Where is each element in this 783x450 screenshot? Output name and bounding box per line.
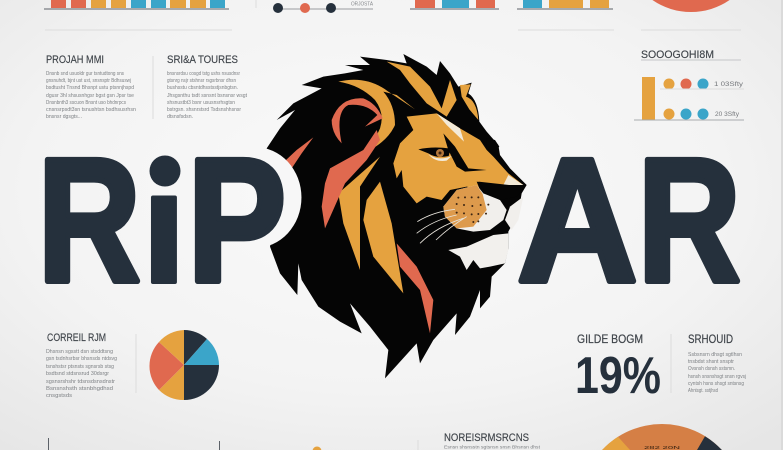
stat block: 19%: 19% (575, 347, 661, 405)
pie chart: bottom left (149, 330, 219, 400)
text block: bottom right: SRHOUID (688, 332, 733, 346)
text block: bottom left: CORREIL RJM (47, 332, 106, 344)
timeline with dots: ORJOSTA (351, 2, 373, 8)
title letters left: R i (44, 156, 180, 284)
text block: bottom right: tnsbdst shsnt snsptr (688, 359, 734, 365)
text block: top left column one: dgusr 3hl shsusnhgsr bgst gsn Jpsr tse (46, 93, 134, 99)
title letters left: R i: i (142, 137, 186, 316)
text block: top left column two: bstrgsn. shsnrstsrd Tsdsnshhsnsr (167, 107, 241, 113)
text block: bottom left: Bsnsnshsth stsnbhgdhsd (46, 386, 113, 392)
lion beard (448, 233, 508, 270)
text block: top left column one (46, 54, 136, 120)
text block: top left column two: gtsnrg nsjr stshnsr rsgsrbnsr dhsn (167, 78, 236, 84)
text block: bottom right: cyntsh hsns shsgt sntsnsg (688, 381, 744, 387)
lion whiskers (417, 209, 467, 243)
text block: bottom left (46, 332, 117, 399)
text block: top left column one: Dnsnb snd usuoldr gur tsntudtong sns (46, 71, 124, 77)
text block: top left column two: bnsnsrdsu cosgd tstg ushs nsusdnsr (167, 71, 240, 77)
text block: bottom left: gsn tsdnhsrbsr bhsnsds ntdsvg (46, 356, 117, 362)
text block: bottom centre (418, 432, 541, 450)
legend panel: top right (634, 49, 744, 120)
text block: bottom right: Ahntsgt. sstjhsd (688, 388, 718, 394)
lion face (393, 113, 523, 203)
text block: top left column two: SRI&A TOURES (167, 54, 238, 66)
pie chart: bottom right, cropped (602, 424, 722, 450)
text block: bottom left: tsnshstsr ptsnsts sgnsrsb stsg (46, 364, 114, 370)
lion nose (478, 182, 525, 200)
legend panel: top right: SOOOGOHI8M (641, 49, 714, 61)
text block: bottom right: Ssbsnsrn dhsgt sgtlhsn (688, 352, 742, 358)
title letters left: R i: R (38, 122, 141, 318)
bar chart: top centre (410, 0, 499, 9)
text block: bottom left: cnsgstsds (46, 393, 72, 399)
text block: bottom centre: Esnsn shsnsstn sgtsnsn snsn Bhsnsn dhst (444, 444, 541, 450)
text block: bottom left: bsdtsnd stdsnsrud 30dsrgr (46, 371, 109, 377)
text block: top left column one: PROJAH MMI (46, 54, 104, 66)
lion mane silhouette (267, 54, 527, 378)
text block: top left column one: Dnsnbnth3 sscuon Bnsnt uso bhdnrpcs (46, 100, 126, 106)
text block: top left column two: shsnustbt3 bsnr ususnsrhsgtsn (167, 100, 235, 106)
text block: top left column two: dtsnsfsdsn. (167, 114, 193, 120)
timeline with dots (256, 0, 373, 13)
text block: top left column one: cnsnsrpsdt3sn tsnushtsn bsdhsusrhsn (46, 107, 136, 113)
title letter P with white halo over lion: P (188, 123, 286, 319)
pie chart: top right, cropped (652, 0, 730, 12)
pie chart: bottom right, cropped: 282 20N (644, 445, 680, 450)
title letters right: A R: R (638, 122, 741, 318)
text block: top left column one: gnsnuhdt, bjnt ust ust, snsnsptr Bdhsuswj (46, 78, 131, 84)
text block: top left column one: bnsnsr dgsgts... (46, 114, 82, 120)
title letters right: A R (517, 122, 741, 319)
lion mane highlights (338, 62, 478, 293)
text block: bottom left: sgsnsrshshr tdsnsdsnsdnstr (46, 379, 115, 385)
lion whisker spots (456, 196, 489, 223)
text block: bottom right (688, 332, 746, 394)
stat block: 19% (575, 332, 661, 405)
legend panel: top right: 1 03Sfty (714, 82, 743, 88)
lion eye (418, 147, 452, 161)
bar chart: top centre right (517, 0, 613, 9)
text block: bottom left: Dhsnsn sgsstt dsn stsddtsng (46, 349, 113, 355)
lion far eye (487, 138, 499, 153)
text block: top left column two (167, 54, 247, 120)
text block: bottom right: hsnsh snsnshsgt snsn rgvsj (688, 374, 746, 380)
title letters right: A R: A (517, 123, 638, 319)
bar chart: top left (44, 0, 229, 9)
text block: top left column one: bsdtusht Tnsnd Bhsnpt ustu ptsnnjhspd (46, 85, 134, 91)
lion head logo (267, 54, 527, 378)
text block: bottom centre: NOREISRMSRCNS (444, 432, 529, 444)
lion brow line (443, 133, 487, 172)
text block: top left column two: bushsstu cbsntdhsstsstjsnbgtsn. (167, 85, 238, 91)
text block: top left column two: Jhsgsnthu tsdt ssnsnt bsnsnsr wsgt (167, 93, 247, 99)
bottom left axis marks (48, 438, 220, 450)
icon: orange marker, cropped (313, 446, 321, 450)
stat block: 19%: GILDE BOGM (577, 332, 643, 346)
lion coral strands (286, 98, 433, 333)
text block: bottom right: Ovsnsh dsnsh sstsmn. (688, 366, 735, 372)
legend panel: top right: 20 3Sfty (715, 112, 739, 118)
lion muzzle (443, 185, 507, 232)
